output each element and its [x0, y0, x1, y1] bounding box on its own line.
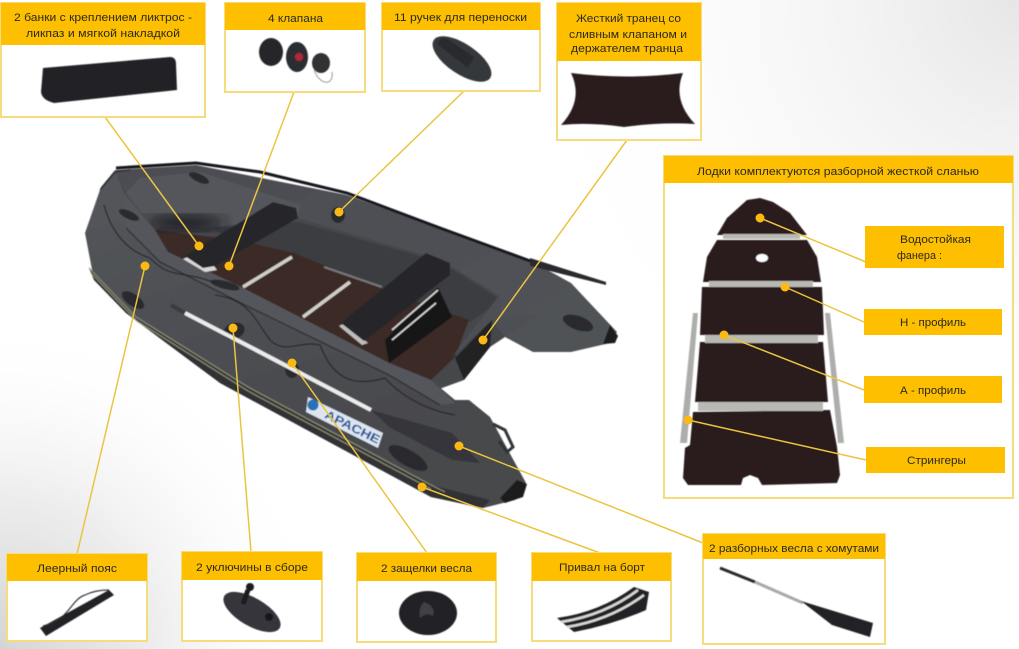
panel: floor kit	[664, 156, 1013, 498]
lower hull strip	[89, 268, 490, 508]
callout lines to boat	[77, 91, 703, 554]
floor profiles	[243, 257, 382, 317]
seat front	[183, 202, 298, 272]
heading: rub strake: Привал на борт	[559, 562, 645, 574]
transom	[452, 293, 540, 380]
heading: transom	[569, 13, 687, 55]
panel: rub strake	[532, 553, 671, 641]
heading: transom: держателем транца	[571, 43, 684, 55]
label: H profile	[864, 309, 1002, 335]
label: plywood: фанера :	[897, 250, 942, 262]
near tube inner lip	[126, 228, 440, 405]
heading: carry handles: 11 ручек для переноски	[394, 12, 527, 24]
icon: oar	[720, 568, 873, 637]
icon: transom board	[561, 73, 695, 127]
heading: oar clips: 2 защелки весла	[381, 563, 473, 575]
far inner wall	[213, 222, 501, 322]
label: H profile: Н - профиль	[900, 317, 966, 329]
label: plywood	[865, 226, 1004, 268]
far tube bow interior	[126, 172, 300, 230]
far tube	[115, 165, 617, 352]
icon: lifeline bag	[40, 590, 114, 636]
panel: oar clips	[357, 553, 496, 642]
floor	[155, 230, 469, 380]
icon: handle	[425, 28, 499, 90]
panel: valves	[225, 3, 365, 92]
heading: benches	[14, 12, 192, 40]
heading: valves: 4 клапана	[268, 13, 324, 25]
heading: benches: ликпаз и мягкой накладкой	[26, 28, 180, 40]
panel: benches	[1, 3, 205, 117]
label: stringers	[866, 447, 1005, 473]
near tube top band	[124, 193, 455, 405]
folded oar far side	[530, 258, 606, 285]
heading: lifeline: Леерный пояс	[37, 563, 118, 575]
heading: transom: Жесткий транец со	[576, 13, 681, 25]
panel: lifeline	[7, 554, 147, 641]
bow shadow	[145, 215, 225, 231]
brand logo: APACHE	[322, 407, 382, 447]
callout lines: floor	[684, 214, 866, 460]
label: A profile	[864, 376, 1002, 403]
inflatable boat photo	[85, 163, 618, 508]
brand logo	[306, 397, 383, 448]
boat interior base	[115, 172, 505, 392]
seat rear and bag	[339, 253, 452, 363]
callout dots on boat	[140, 208, 488, 492]
lifeline ropes	[100, 170, 455, 415]
panel: oarlocks	[182, 552, 322, 641]
stern handle	[493, 424, 513, 452]
icon: valves	[259, 38, 332, 82]
heading: floor kit: Лодки комплектуются разборной жесткой сланью	[697, 166, 979, 178]
icon: strake sample	[557, 587, 649, 632]
label: plywood: Водостойкая	[900, 234, 971, 246]
near tube	[85, 170, 526, 508]
heading: oars: 2 разборных весла с хомутами	[709, 543, 879, 555]
heading: benches: 2 банки с креплением ликтрос -	[14, 12, 192, 24]
icon: bench pad	[41, 57, 177, 103]
icon: clip	[399, 591, 457, 635]
rub strake	[89, 268, 445, 492]
panel: transom	[557, 3, 701, 140]
panel: oars	[703, 534, 885, 644]
top rope	[116, 163, 561, 272]
floor sections diagram	[680, 198, 844, 485]
panel: carry handles	[382, 3, 540, 91]
icon: oarlock	[217, 583, 287, 640]
tube nose caps	[500, 325, 618, 503]
carry handles	[117, 170, 595, 476]
near oar	[171, 305, 480, 463]
label: stringers: Стрингеры	[907, 455, 966, 467]
label: A profile: А - профиль	[900, 385, 966, 397]
heading: oarlocks: 2 уключины в сборе	[196, 562, 308, 574]
heading: transom: сливным клапаном и	[569, 29, 687, 41]
